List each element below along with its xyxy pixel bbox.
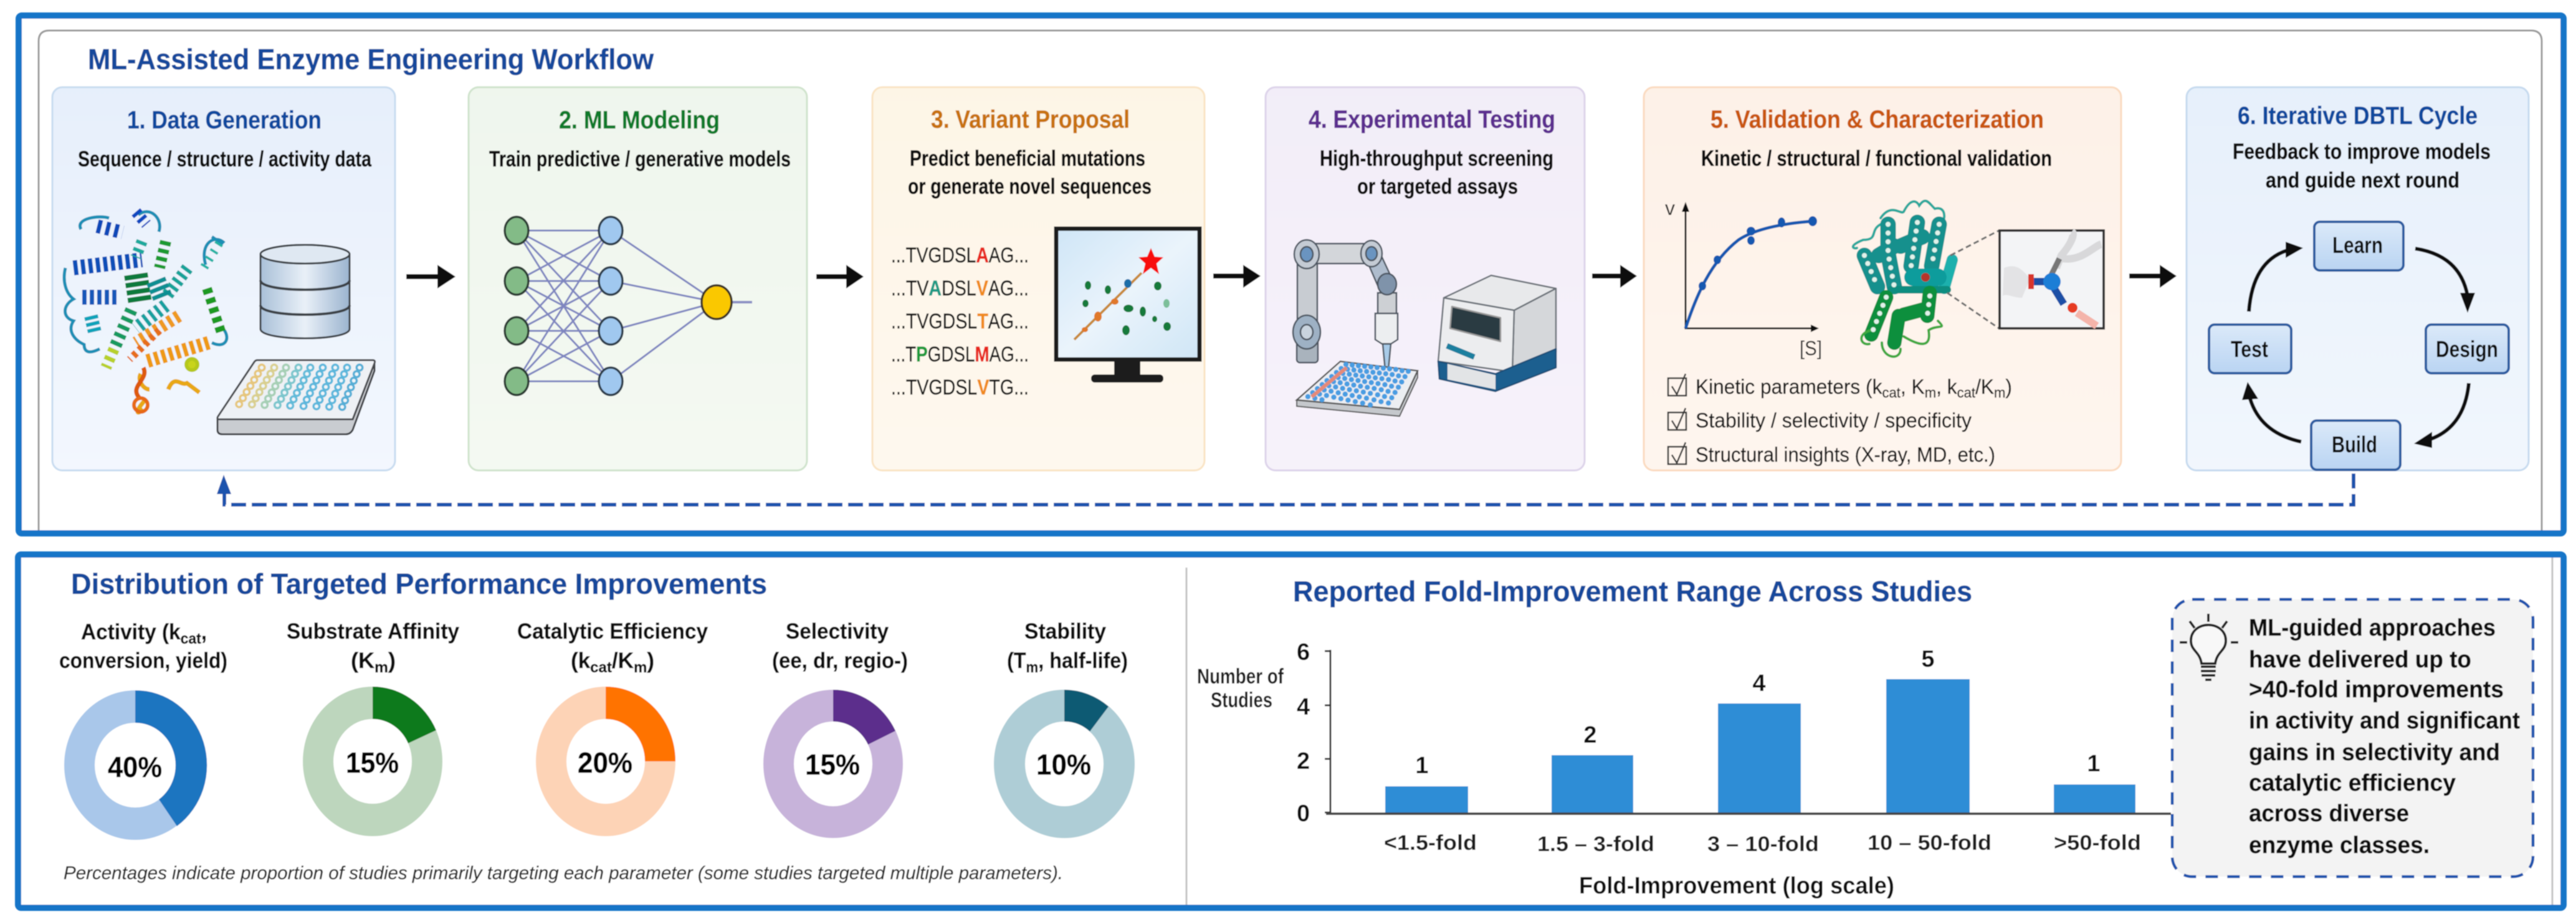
divider <box>1186 558 2552 905</box>
x axis <box>1326 812 2171 815</box>
icon: database <box>260 245 350 338</box>
panel: 1. Data Generation <box>52 87 395 470</box>
checklist: cat <box>1882 384 1901 401</box>
donut: catalytic efficiency: /K <box>612 649 634 673</box>
donut: activity: conversion, yield) <box>59 649 227 673</box>
donut: substrate affinity: m <box>374 659 388 676</box>
checklist: /K <box>1975 375 1994 398</box>
donut: stability: m <box>1026 659 1038 676</box>
donut: stability: (T <box>1007 649 1028 673</box>
icon: protein ribbon <box>64 212 227 412</box>
checklist: Kinetic parameters (k <box>1696 375 1890 398</box>
heading 5: 5. Validation & Characterization <box>1710 106 2044 133</box>
bar value labels <box>1415 646 2101 779</box>
checklist <box>1668 374 2012 466</box>
heading 4: 4. Experimental Testing <box>1309 106 1555 133</box>
donut: activity: 40% <box>108 751 162 783</box>
y axis: 0 <box>1297 801 1310 827</box>
zoom guides <box>1947 231 1999 328</box>
subheading 6 <box>2233 140 2491 193</box>
donut: activity: Activity (k <box>81 620 185 644</box>
subheading 2: Train predictive / generative models <box>489 147 791 171</box>
callout text: in activity and significant <box>2249 708 2520 734</box>
heading 2: 2. ML Modeling <box>559 107 720 134</box>
frame: workflow section <box>19 16 2564 533</box>
sequence list: ...TPGDSLMAG... <box>891 343 1029 366</box>
x axis title: Fold-Improvement (log scale) <box>1579 873 1894 899</box>
x tick labels <box>1384 831 2141 856</box>
checklist: , k <box>1936 375 1957 398</box>
checklist: , K <box>1901 375 1925 398</box>
x tick labels: 10 – 50-fold <box>1868 831 1992 855</box>
arrow: feedback loop <box>217 474 2354 505</box>
subheading 5: Kinetic / structural / functional validation <box>1701 146 2052 171</box>
bar value labels: 1 <box>1415 753 1429 779</box>
kinetics chart: [S] <box>1800 337 1822 360</box>
callout text: >40-fold improvements <box>2249 677 2504 703</box>
subheading 1: Sequence / structure / activity data <box>78 147 371 171</box>
donut: catalytic efficiency: 20% <box>578 746 632 779</box>
arrow: 1 to 2 <box>406 265 456 288</box>
callout text: gains in selectivity and <box>2249 740 2500 766</box>
y axis: 4 <box>1297 694 1310 720</box>
title: ML-Assisted Enzyme Engineering Workflow <box>88 43 654 75</box>
checklist: m <box>1925 384 1936 401</box>
donut: substrate affinity: Substrate Affinity <box>287 619 460 644</box>
heading 1: 1. Data Generation <box>127 107 322 134</box>
panel: 4. Experimental Testing <box>1266 87 1585 470</box>
heading 6: 6. Iterative DBTL Cycle <box>2238 102 2478 130</box>
panel: 3. Variant Proposal <box>872 87 1205 470</box>
subheading 4 <box>1320 146 1553 199</box>
icon: robot arm <box>1293 240 1398 377</box>
inset: active site <box>2000 231 2104 328</box>
donut: catalytic efficiency: cat <box>590 659 612 676</box>
bar value labels: 5 <box>1921 646 1935 672</box>
subheading 6: Feedback to improve models <box>2233 140 2491 164</box>
x tick labels: >50-fold <box>2054 831 2141 855</box>
y axis: Number of <box>1197 665 1284 688</box>
sequence list: ...TVGDSLVTG... <box>891 376 1029 399</box>
node: Design: Design <box>2436 336 2498 362</box>
donut: selectivity: 15% <box>805 748 860 781</box>
donut: catalytic efficiency: (k <box>571 649 590 673</box>
heading: distribution: Distribution of Targeted Performance Improvements <box>71 568 767 600</box>
checklist: Structural insights (X-ray, MD, etc.) <box>1696 443 1995 466</box>
bars <box>1385 679 2135 814</box>
heading: fold improvement: Reported Fold-Improvement Range Across Studies <box>1293 575 1972 607</box>
kinetics chart <box>1665 197 1822 360</box>
donut: catalytic efficiency <box>517 619 708 836</box>
icon: protein structure <box>1853 201 1952 356</box>
checklist: m <box>1994 384 2005 401</box>
node: Build: Build <box>2332 432 2377 457</box>
panel: fold-improvement chart <box>1197 575 2171 899</box>
subheading 4: or targeted assays <box>1357 174 1518 199</box>
arrow: 3 to 4 <box>1213 265 1261 288</box>
callout text: across diverse <box>2249 801 2409 827</box>
x tick labels: 3 – 10-fold <box>1707 832 1819 856</box>
donut: substrate affinity: ) <box>388 649 396 673</box>
y axis: 2 <box>1297 748 1310 774</box>
callout text <box>2249 615 2520 859</box>
node: Test: Test <box>2231 336 2268 362</box>
subheading 6: and guide next round <box>2266 168 2459 193</box>
arrow: 4 to 5 <box>1592 265 1637 288</box>
callout text: catalytic efficiency <box>2249 770 2456 796</box>
donut: substrate affinity <box>287 619 460 836</box>
donut: stability: Stability <box>1024 619 1107 644</box>
arrow: 5 to 6 <box>2129 265 2177 288</box>
inner gray frame <box>39 31 2542 530</box>
y axis: 6 <box>1297 639 1310 665</box>
checklist: cat <box>1957 384 1976 401</box>
footnote: Percentages indicate proportion of studies primarily targeting each parameter (some studies targeted multiple parameters). <box>64 863 1063 884</box>
checklist: Stability / selectivity / specificity <box>1696 409 1972 432</box>
icon: screening plate <box>1297 361 1418 416</box>
subheading 3 <box>908 146 1152 199</box>
donut: selectivity <box>763 619 908 838</box>
donut: activity: cat <box>181 631 201 647</box>
subheading 3: or generate novel sequences <box>908 174 1152 199</box>
icon: well plate <box>217 360 375 434</box>
frame: results section <box>18 555 2564 908</box>
donut: catalytic efficiency: m <box>634 659 647 676</box>
bar value labels: 1 <box>2087 751 2101 777</box>
node: Learn: Learn <box>2332 232 2383 258</box>
y axis: Studies <box>1211 688 1272 712</box>
icon: light bulb <box>2180 614 2238 680</box>
donut: stability <box>994 619 1135 838</box>
panel: distribution of targeted performance improvements <box>59 568 1135 884</box>
donut: catalytic efficiency: ) <box>647 649 654 673</box>
callout text: enzyme classes. <box>2249 832 2430 859</box>
donut: catalytic efficiency: Catalytic Efficiency <box>517 619 708 644</box>
node: Build <box>2311 421 2400 470</box>
cycle arrows <box>2242 242 2475 448</box>
donut: stability: 10% <box>1036 748 1091 781</box>
callout <box>2172 599 2533 877</box>
panel: 5. Validation and Characterization <box>1644 87 2121 470</box>
sequence list: ...TVGDSLAAG... <box>891 244 1029 267</box>
bar value labels: 4 <box>1752 670 1766 697</box>
subheading 3: Predict beneficial mutations <box>910 146 1145 171</box>
bar value labels: 2 <box>1583 722 1597 748</box>
neural network <box>505 217 752 395</box>
icon: monitor with scatter <box>1056 229 1200 383</box>
subheading 4: High-throughput screening <box>1320 146 1553 171</box>
node: Test <box>2209 325 2291 373</box>
donut: selectivity: (ee, dr, regio-) <box>772 649 908 673</box>
donut: substrate affinity: 15% <box>346 746 399 779</box>
donut: activity: , <box>201 620 207 644</box>
donut: selectivity: Selectivity <box>786 619 889 644</box>
x tick labels: 1.5 – 3-fold <box>1537 832 1654 856</box>
icon: plate reader <box>1438 275 1556 391</box>
callout text: have delivered up to <box>2249 647 2471 673</box>
panel: 2. ML Modeling <box>469 87 807 470</box>
node: Design <box>2426 325 2509 373</box>
donut: stability: , half-life) <box>1038 649 1128 673</box>
y axis <box>1197 639 1330 827</box>
heading 3: 3. Variant Proposal <box>931 106 1130 133</box>
kinetics chart: v <box>1665 197 1675 219</box>
x tick labels: <1.5-fold <box>1384 831 1477 855</box>
panel: 6. Iterative DBTL Cycle <box>2187 87 2529 470</box>
sequence list: ...TVADSLVAG... <box>891 277 1029 300</box>
donut: substrate affinity: (K <box>351 649 374 673</box>
arrow: 2 to 3 <box>816 265 864 288</box>
sequence list: ...TVGDSLTAG... <box>891 310 1029 333</box>
node: Learn <box>2314 222 2403 270</box>
callout text: ML-guided approaches <box>2249 615 2496 641</box>
sequence list <box>891 244 1029 399</box>
checklist: ) <box>2005 375 2012 398</box>
donut: activity <box>59 620 227 840</box>
